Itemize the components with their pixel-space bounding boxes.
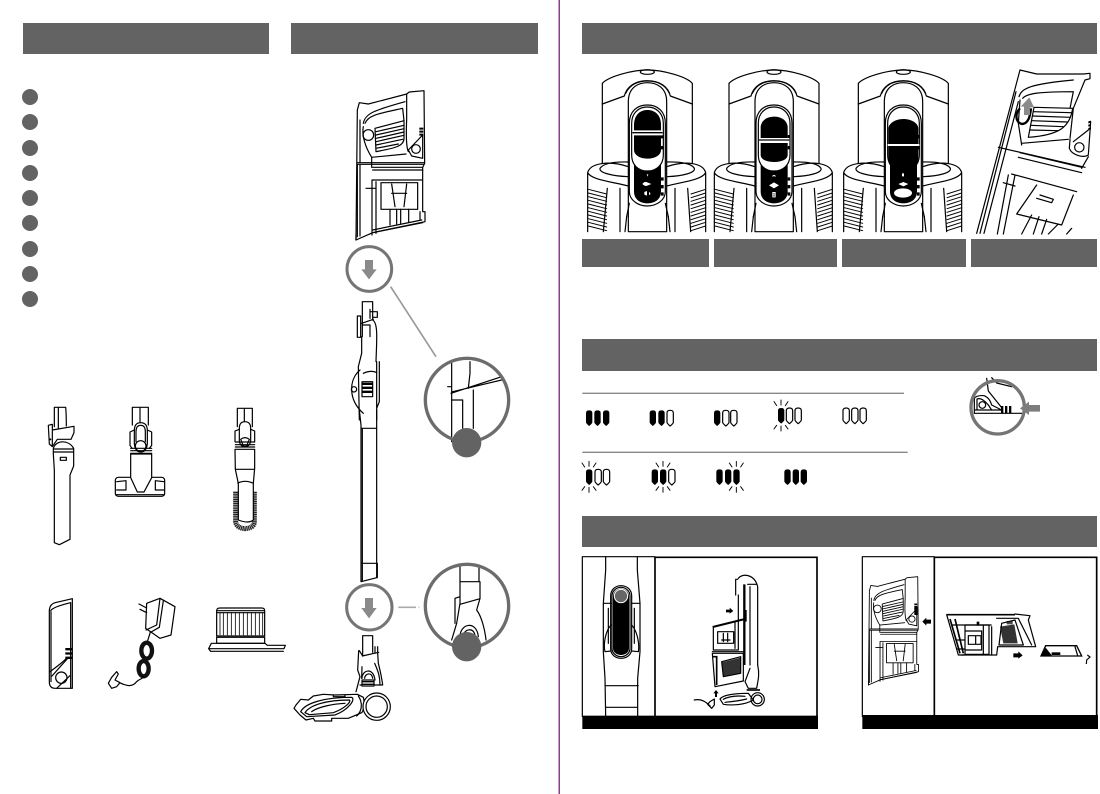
indicator: charging two xyxy=(652,461,675,492)
heading bar: charging xyxy=(582,516,1097,547)
illustration: mode 2 panel xyxy=(714,70,832,232)
illustration: vacuum on charge xyxy=(694,575,764,708)
mode label bars xyxy=(582,239,1097,267)
icon: mini motorised brush xyxy=(115,407,165,496)
heading bar: indicator lights xyxy=(582,339,1097,371)
indicator: three lit xyxy=(586,410,609,426)
indicator: fully charged xyxy=(784,469,807,485)
callout: indicator location xyxy=(971,378,1040,434)
marker 1 xyxy=(452,428,481,457)
indicator: two lit xyxy=(650,410,673,426)
assembly column lower xyxy=(294,410,509,721)
arrow: battery in xyxy=(726,608,733,614)
icon: cord xyxy=(694,700,710,706)
panel: charging method A xyxy=(582,557,818,729)
connector line xyxy=(398,605,419,610)
icon: battery pack xyxy=(49,599,72,688)
arrow: battery port xyxy=(922,618,931,626)
indicator: one flashing xyxy=(774,400,801,431)
heading bar: assembly xyxy=(291,23,538,54)
illustration: power trigger side view xyxy=(977,70,1091,234)
indicator: charging three xyxy=(716,461,743,492)
detail circle 1: wand joint xyxy=(425,358,509,457)
panel: charging method B xyxy=(862,557,1098,729)
frame xyxy=(862,557,934,717)
arrow: charger up xyxy=(713,690,719,697)
icon: charger adapter and cord xyxy=(108,598,175,688)
icon: removed battery xyxy=(1041,646,1082,656)
icon: filter xyxy=(209,608,285,651)
divider line bottom xyxy=(582,450,908,454)
marker 2 xyxy=(452,632,481,661)
icon: crevice tool xyxy=(48,407,74,545)
illustration: handheld vacuum body xyxy=(356,91,425,240)
arrow: release direction xyxy=(1013,651,1023,659)
callout: click arrow top xyxy=(347,247,392,291)
illustration: wand upper part xyxy=(351,302,379,420)
heading bar: contents xyxy=(23,23,269,54)
illustration: battery removal body xyxy=(947,614,1036,655)
indicator lights xyxy=(582,393,908,492)
indicator: one lit xyxy=(714,410,737,426)
divider line top xyxy=(582,391,904,395)
frame xyxy=(582,557,655,717)
indicator: none lit xyxy=(843,408,866,424)
page divider xyxy=(558,0,560,794)
illustration: handheld with battery port xyxy=(868,577,918,685)
pods drawn in zoom coordinates xyxy=(588,70,832,232)
connector line xyxy=(391,287,436,357)
detail circle 2: head joint xyxy=(425,564,509,661)
heading bar: operating modes xyxy=(582,23,1097,54)
indicator: charging one xyxy=(582,461,610,492)
illustration: floor head xyxy=(294,636,390,721)
assembly column upper xyxy=(347,91,436,420)
illustration: mode 3 panel xyxy=(844,70,962,232)
numbered list bullets xyxy=(22,89,38,307)
icon: charger plug xyxy=(1086,655,1090,664)
accessories group xyxy=(48,407,285,688)
illustration: wand tube xyxy=(359,410,377,582)
icon: dusting brush xyxy=(235,408,255,529)
illustration: mode 1 panel xyxy=(588,70,706,232)
callout: click arrow bottom xyxy=(347,585,392,630)
illustration: wand docking close-up xyxy=(603,557,640,717)
